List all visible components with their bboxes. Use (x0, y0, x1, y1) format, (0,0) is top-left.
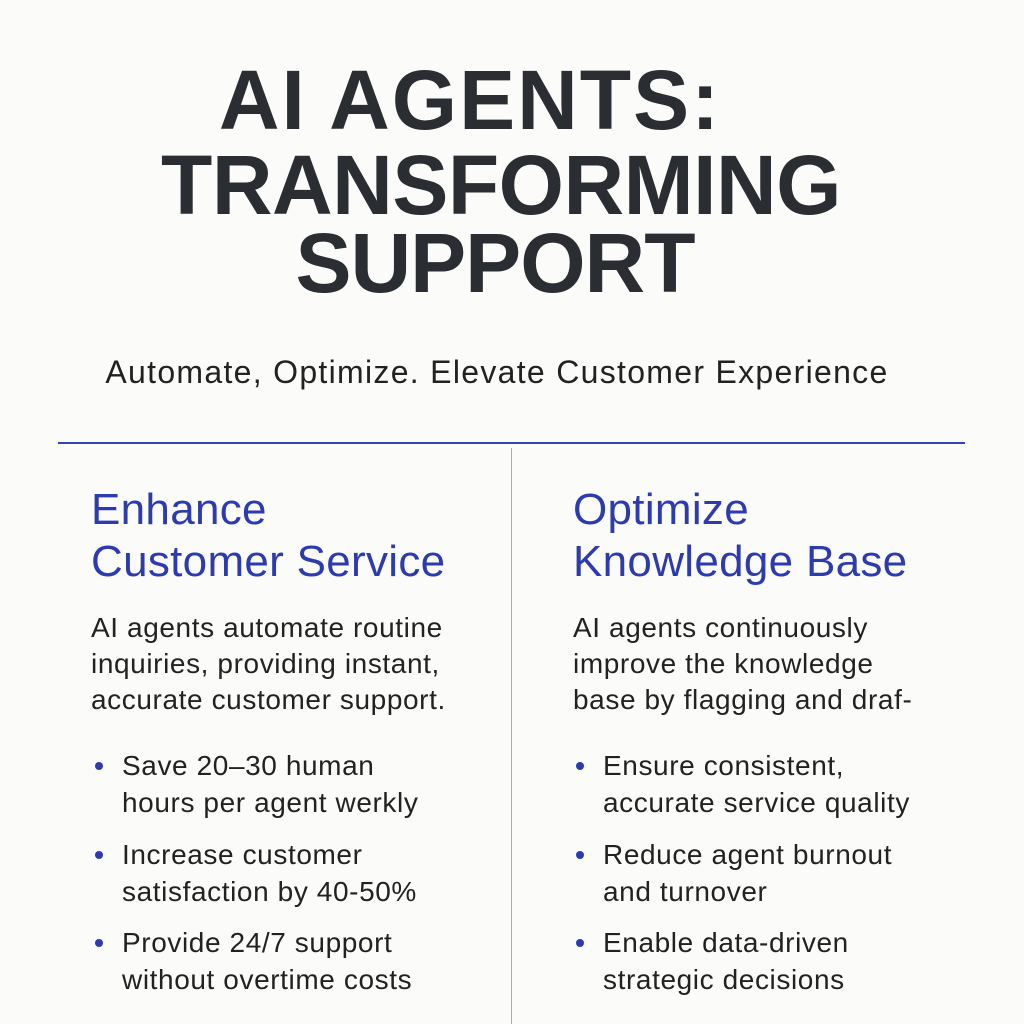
bullet list (576, 750, 910, 995)
heading: Knowledge Base (573, 537, 907, 586)
body text: accurate customer support. (91, 684, 446, 715)
heading (91, 485, 445, 586)
panel: enhance customer service (91, 485, 446, 995)
heading: Customer Service (91, 537, 445, 586)
title (161, 53, 841, 310)
body text: base by flagging and draf- (573, 684, 912, 715)
bullet list: without overtime costs (122, 964, 412, 995)
panel: optimize knowledge base (573, 485, 912, 995)
title: SUPPORT (295, 216, 695, 310)
bullet list: Save 20–30 human (122, 750, 374, 781)
bullet list: accurate service quality (603, 787, 910, 818)
body text: AI agents automate routine (91, 612, 443, 643)
bullet list: Provide 24/7 support (122, 927, 392, 958)
body text (91, 612, 446, 715)
heading: Optimize (573, 485, 749, 534)
bullet list: Reduce agent burnout (603, 839, 892, 870)
body text: AI agents continuously (573, 612, 868, 643)
title: AI AGENTS: (219, 53, 721, 147)
title: TRANSFORMING (161, 138, 841, 232)
divider: horizontal (58, 442, 965, 444)
subtitle: Automate, Optimize. Elevate Customer Experience (105, 354, 889, 390)
divider: vertical (511, 448, 512, 1024)
body text (573, 612, 912, 715)
body text: improve the knowledge (573, 648, 874, 679)
bullet list: satisfaction by 40-50% (122, 876, 417, 907)
bullet list: strategic decisions (603, 964, 845, 995)
bullet list: hours per agent werkly (122, 787, 418, 818)
bullet list: Ensure consistent, (603, 750, 844, 781)
bullet list: Enable data-driven (603, 927, 849, 958)
bullet list: and turnover (603, 876, 767, 907)
body text: inquiries, providing instant, (91, 648, 440, 679)
heading (573, 485, 907, 586)
bullet list: Increase customer (122, 839, 363, 870)
heading: Enhance (91, 485, 267, 534)
bullet list (95, 750, 418, 995)
